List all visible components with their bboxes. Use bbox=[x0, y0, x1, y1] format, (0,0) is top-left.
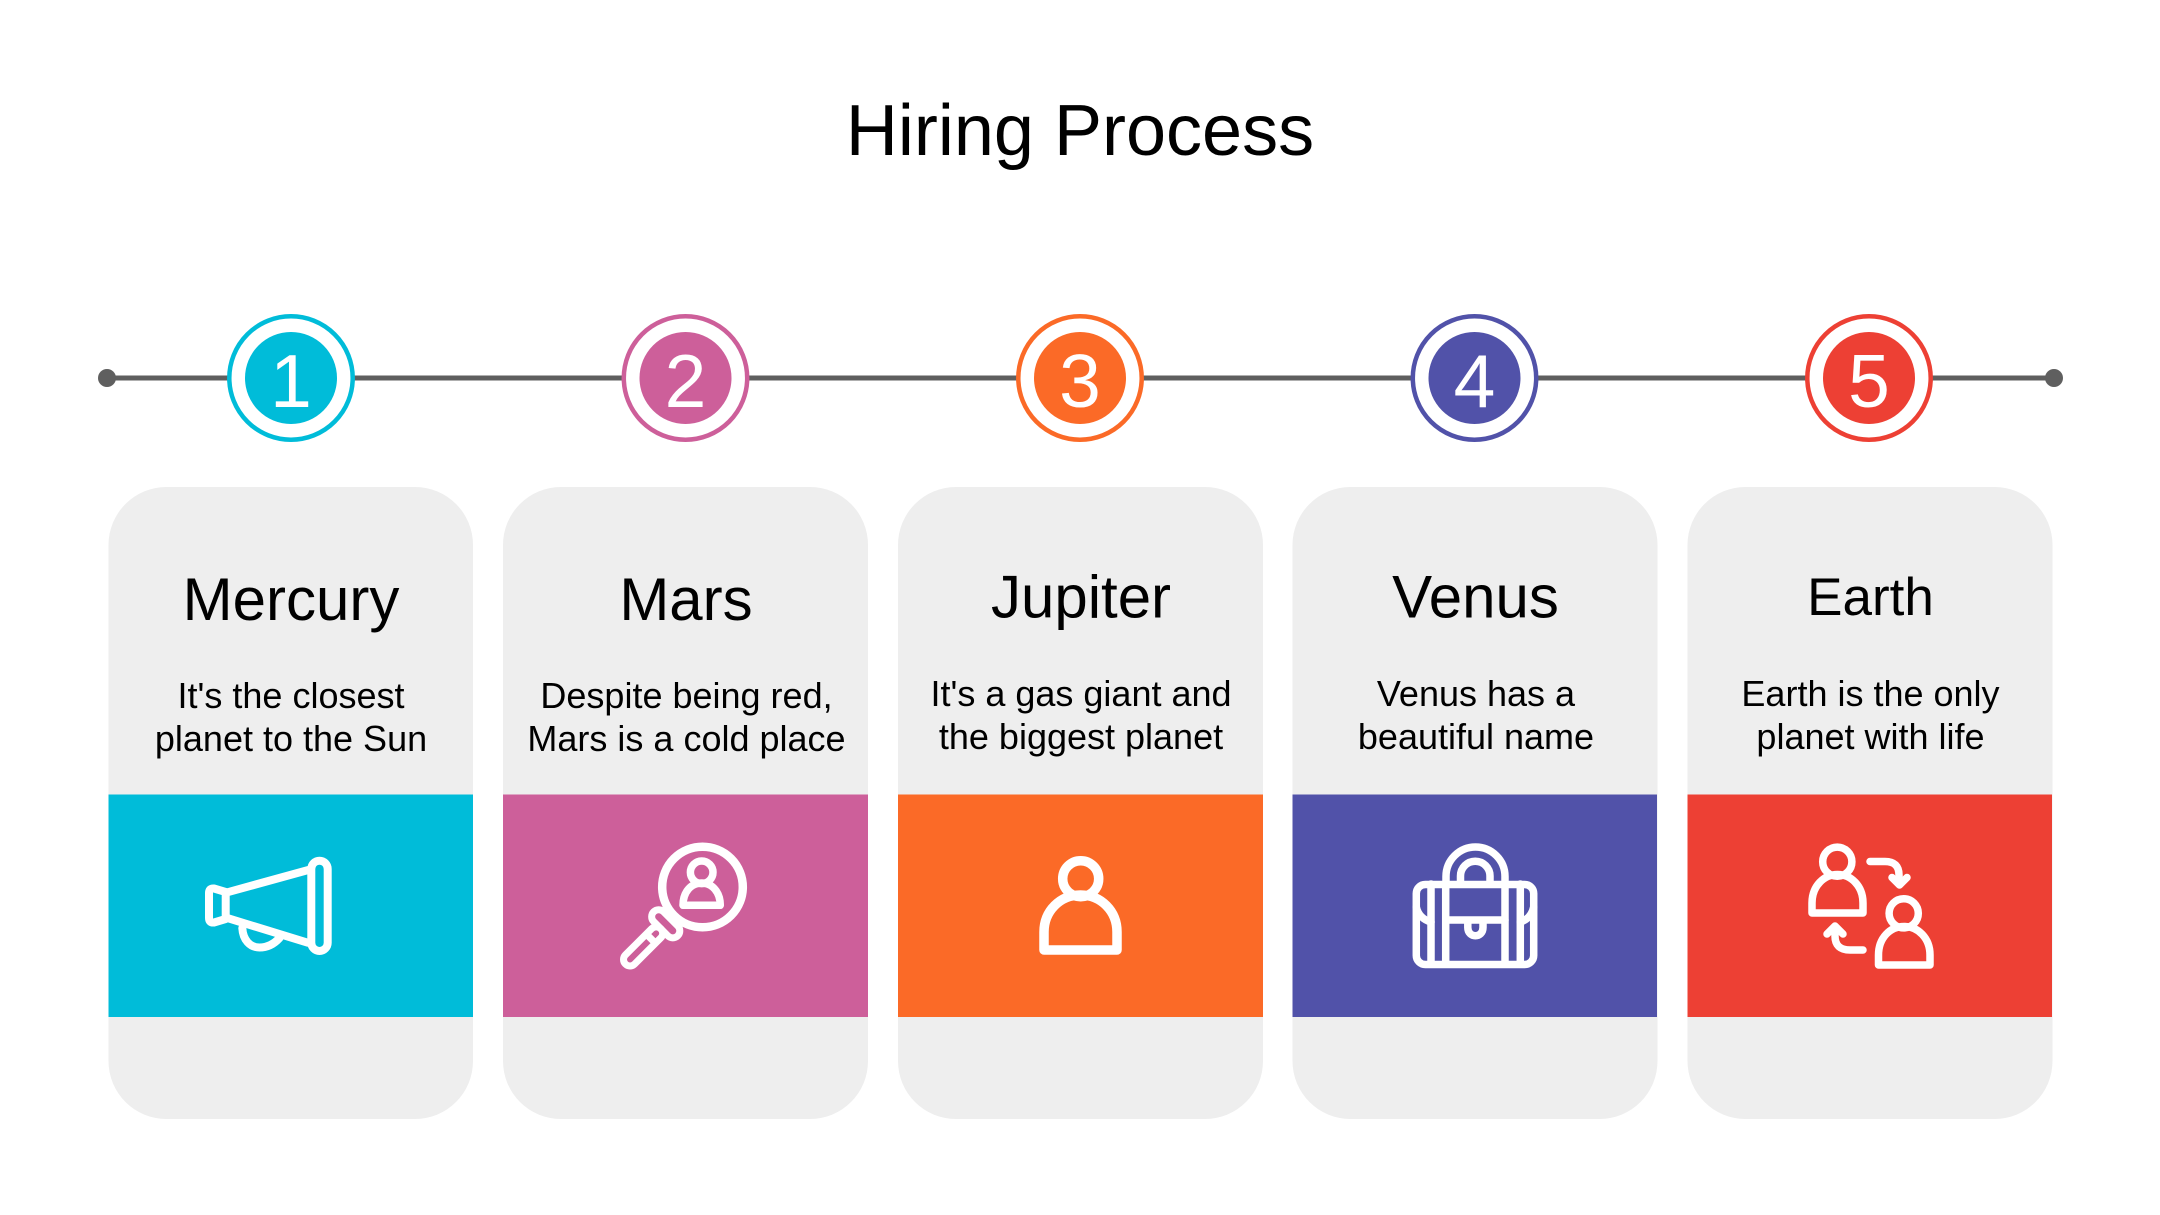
text: Mercury description: planet to the Sun bbox=[155, 718, 427, 759]
panel: Mars bbox=[503, 487, 868, 1119]
icon: person bbox=[1044, 861, 1117, 950]
text: Earth description: planet with life bbox=[1756, 716, 1985, 757]
step marker 4 bbox=[1413, 316, 1536, 440]
text: Venus description: beautiful name bbox=[1358, 716, 1594, 757]
step marker 1: 1 bbox=[270, 339, 312, 423]
step marker 1 bbox=[229, 316, 353, 440]
heading: Jupiter: Jupiter bbox=[991, 564, 1171, 630]
timeline bbox=[98, 316, 2063, 440]
step marker 3 bbox=[1018, 316, 1142, 440]
heading: Venus: Venus bbox=[1392, 564, 1559, 630]
heading: Mars: Mars bbox=[619, 566, 753, 633]
text: Jupiter description: It's a gas giant and bbox=[930, 673, 1232, 714]
icon: megaphone bbox=[209, 861, 328, 951]
heading: Mercury: Mercury bbox=[183, 566, 399, 633]
panel: Venus bbox=[1292, 487, 1658, 1119]
step marker 5 bbox=[1807, 316, 1931, 440]
text: Jupiter description: the biggest planet bbox=[939, 716, 1223, 757]
text: Earth description: Earth is the only bbox=[1741, 673, 2000, 714]
text: Mars description: Mars is a cold place bbox=[527, 718, 846, 759]
step marker 2: 2 bbox=[665, 339, 706, 423]
text: Venus description: Venus has a bbox=[1377, 673, 1575, 714]
text: Mars description: Despite being red, bbox=[540, 675, 833, 716]
icon: magnifier with person bbox=[613, 847, 743, 976]
text: Mercury description: It's the closest bbox=[178, 675, 404, 716]
heading: Earth: Earth bbox=[1807, 568, 1934, 627]
step marker 5: 5 bbox=[1848, 339, 1890, 423]
icon: briefcase bbox=[1416, 847, 1534, 964]
step marker 2 bbox=[624, 316, 747, 440]
panel: Earth bbox=[1688, 487, 2052, 1119]
step marker 3: 3 bbox=[1059, 339, 1101, 423]
title: Hiring Process bbox=[846, 91, 1314, 171]
panel: Jupiter bbox=[898, 487, 1263, 1119]
step marker 4: 4 bbox=[1454, 339, 1495, 423]
panel: Mercury bbox=[108, 487, 473, 1119]
icon: two people swapping bbox=[1812, 847, 1930, 965]
